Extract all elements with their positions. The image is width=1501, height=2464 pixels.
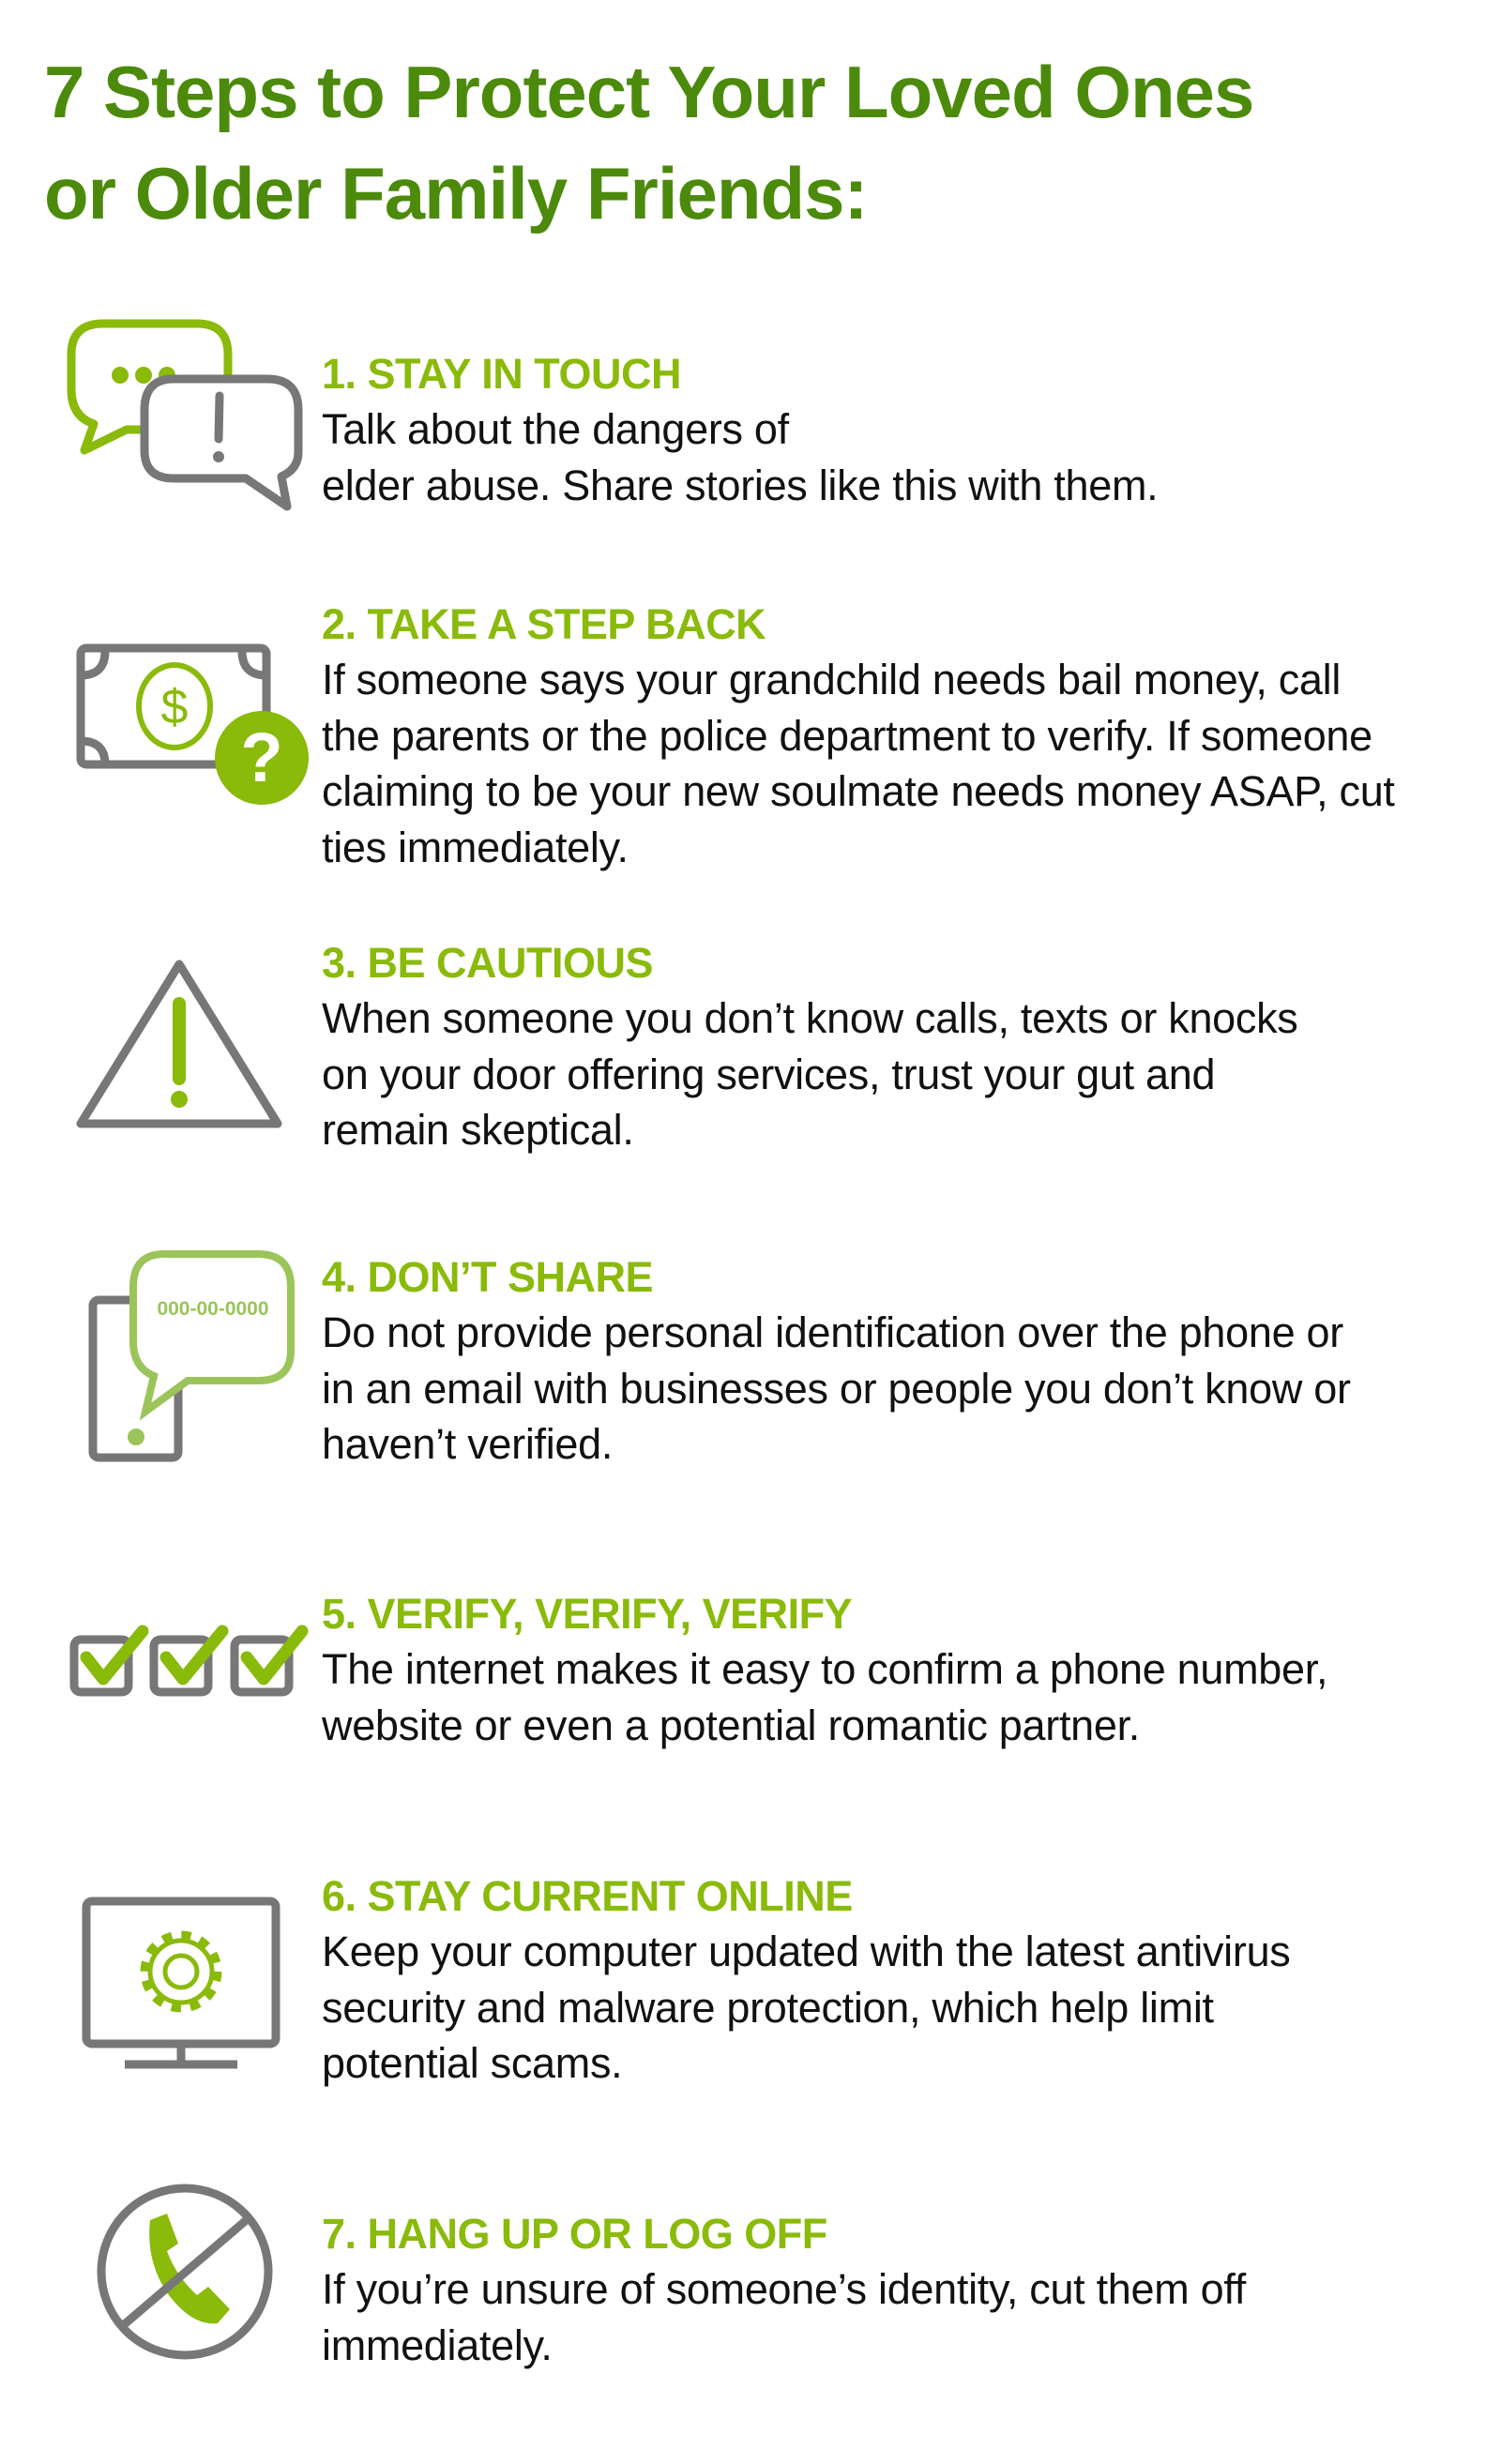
icon: phone with SSN bubble [93,1254,291,1458]
step 3: When someone you don’t know calls, texts or knocks [322,994,1298,1042]
icon: money with question [81,648,309,805]
title: 7 Steps to Protect Your Loved Ones [44,51,1253,133]
title: or Older Family Friends: [44,152,868,234]
step 2 [322,600,1395,870]
icon: money with question: $ [161,680,189,734]
step 6: 6. STAY CURRENT ONLINE [322,1872,853,1920]
step 1: 1. STAY IN TOUCH [322,350,681,398]
step 2: ties immediately. [322,824,629,870]
step 2: If someone says your grandchild needs bail money, call [322,656,1341,703]
title [44,51,1253,234]
step 6: Keep your computer updated with the latest antivirus [322,1927,1291,1975]
step 5 [322,1590,1327,1748]
step 5: The internet makes it easy to confirm a phone number, [322,1645,1327,1693]
step 4: 4. DON’T SHARE [322,1253,653,1301]
step 5: 5. VERIFY, VERIFY, VERIFY [322,1590,852,1638]
step 3: remain skeptical. [322,1106,634,1154]
step 3: 3. BE CAUTIOUS [322,939,653,987]
step 2: the parents or the police department to verify. If someone [322,711,1372,760]
step 4: Do not provide personal identification over the phone or [322,1308,1343,1356]
step 1: Talk about the dangers of [322,405,789,453]
step 3: on your door offering services, trust your gut and [322,1051,1215,1097]
icon: chat bubbles [71,324,298,506]
step 4: haven’t verified. [322,1420,613,1468]
step 6: potential scams. [322,2039,622,2087]
step 7: 7. HANG UP OR LOG OFF [322,2210,827,2258]
icon: money with question: ? [240,718,283,796]
step 6 [322,1872,1291,2087]
step 4: in an email with businesses or people you don’t know or [322,1364,1351,1413]
step 7: If you’re unsure of someone’s identity, cut them off [322,2265,1246,2313]
step 6: security and malware protection, which help limit [322,1983,1214,2032]
step 4 [322,1253,1351,1468]
step 1 [322,350,1158,508]
step 3 [322,939,1298,1154]
step 2: 2. TAKE A STEP BACK [322,600,766,648]
icon: monitor with gear [86,1901,276,2064]
step 7: immediately. [322,2320,553,2369]
icon: warning triangle [81,964,278,1124]
step 2: claiming to be your new soulmate needs money ASAP, cut [322,767,1395,815]
step 1: elder abuse. Share stories like this with them. [322,461,1158,508]
step 5: website or even a potential romantic partner. [322,1701,1140,1748]
icon: no phone [101,2188,268,2355]
icon: three checkboxes [74,1631,302,1692]
icon: phone with SSN bubble: 000-00-0000 [157,1298,269,1320]
step 7 [322,2210,1246,2369]
